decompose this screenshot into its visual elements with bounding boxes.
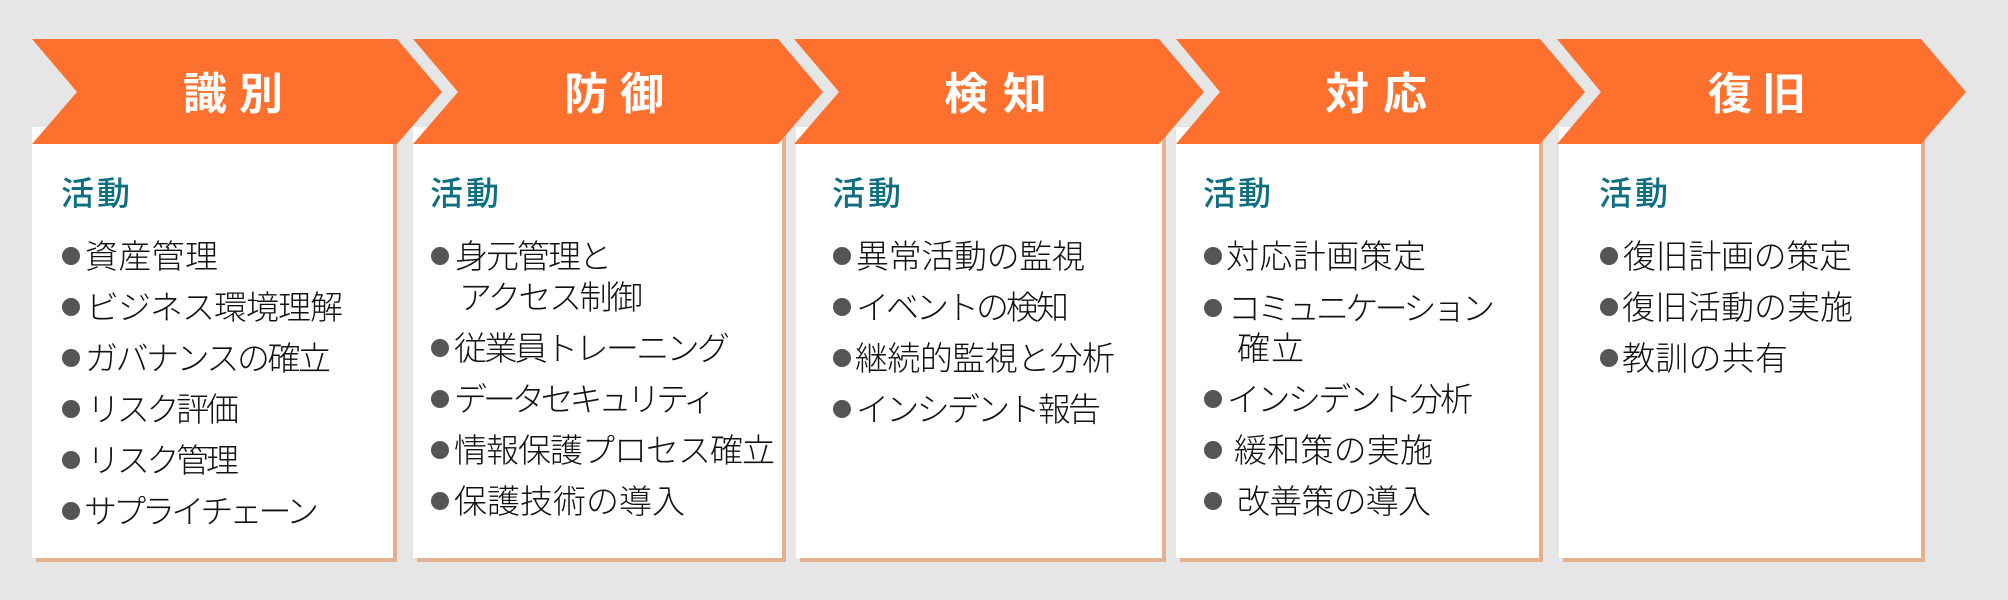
activity list: ビジネス環境理解 [86,289,343,326]
heading arrow: 対応: 対応 [1325,70,1427,119]
panel: 対応 [1176,39,1585,562]
activity list: 教訓の共有 [1622,340,1788,377]
activity list [1204,238,1495,520]
activity list: 復旧計画の策定 [1623,238,1852,275]
heading arrow: 復旧 [1557,39,1966,144]
activity list: 緩和策の実施 [1234,432,1433,469]
activity list: 復旧活動の実施 [1622,289,1853,326]
activity list: 保護技術の導入 [454,483,685,520]
activity list: サプライチェーン [84,493,319,530]
panel: 識別 [32,39,442,562]
heading arrow: 識別 [32,39,442,144]
panel: 検知 [794,39,1204,562]
heading arrow: 防御 [413,39,823,144]
heading arrow: 識別: 識別 [183,70,283,119]
activity list: データセキュリティ [454,381,716,418]
activity list: リスク管理 [87,442,239,479]
activity list: 資産管理 [85,238,218,275]
activity list: アクセス制御 [459,279,643,316]
activity list: 確立 [1237,330,1304,367]
activity list [833,238,1115,428]
activity list [431,238,775,520]
activity list: コミュニケーション [1228,290,1495,327]
activity list: 情報保護プロセス確立 [454,432,775,469]
activity list: 対応計画策定 [1226,238,1426,275]
panel: 復旧 [1557,39,1966,562]
heading arrow: 復旧: 復旧 [1708,70,1806,119]
subheading: 活動: 活動 [1203,175,1271,212]
activity list: インシデント分析 [1227,381,1473,418]
activity list: インシデント報告 [856,391,1101,428]
activity list: ガバナンスの確立 [85,340,331,377]
heading arrow: 検知 [794,39,1204,144]
heading arrow: 対応 [1176,39,1585,144]
activity list: イベントの検知 [856,289,1069,326]
activity list: 従業員トレーニング [454,330,730,367]
activity list: 異常活動の監視 [856,238,1085,275]
heading arrow: 防御: 防御 [564,70,664,119]
heading arrow: 検知: 検知 [944,70,1047,119]
subheading: 活動: 活動 [61,175,130,212]
activity list [62,238,343,530]
activity list: 身元管理と [455,238,612,275]
activity list: 改善策の導入 [1237,483,1431,520]
activity list [1600,238,1853,377]
subheading: 活動: 活動 [832,175,901,212]
subheading: 活動: 活動 [1599,175,1668,212]
subheading: 活動: 活動 [430,175,499,212]
panel: 防御 [413,39,823,562]
activity list: リスク評価 [87,391,239,428]
activity list: 継続的監視と分析 [855,340,1115,377]
